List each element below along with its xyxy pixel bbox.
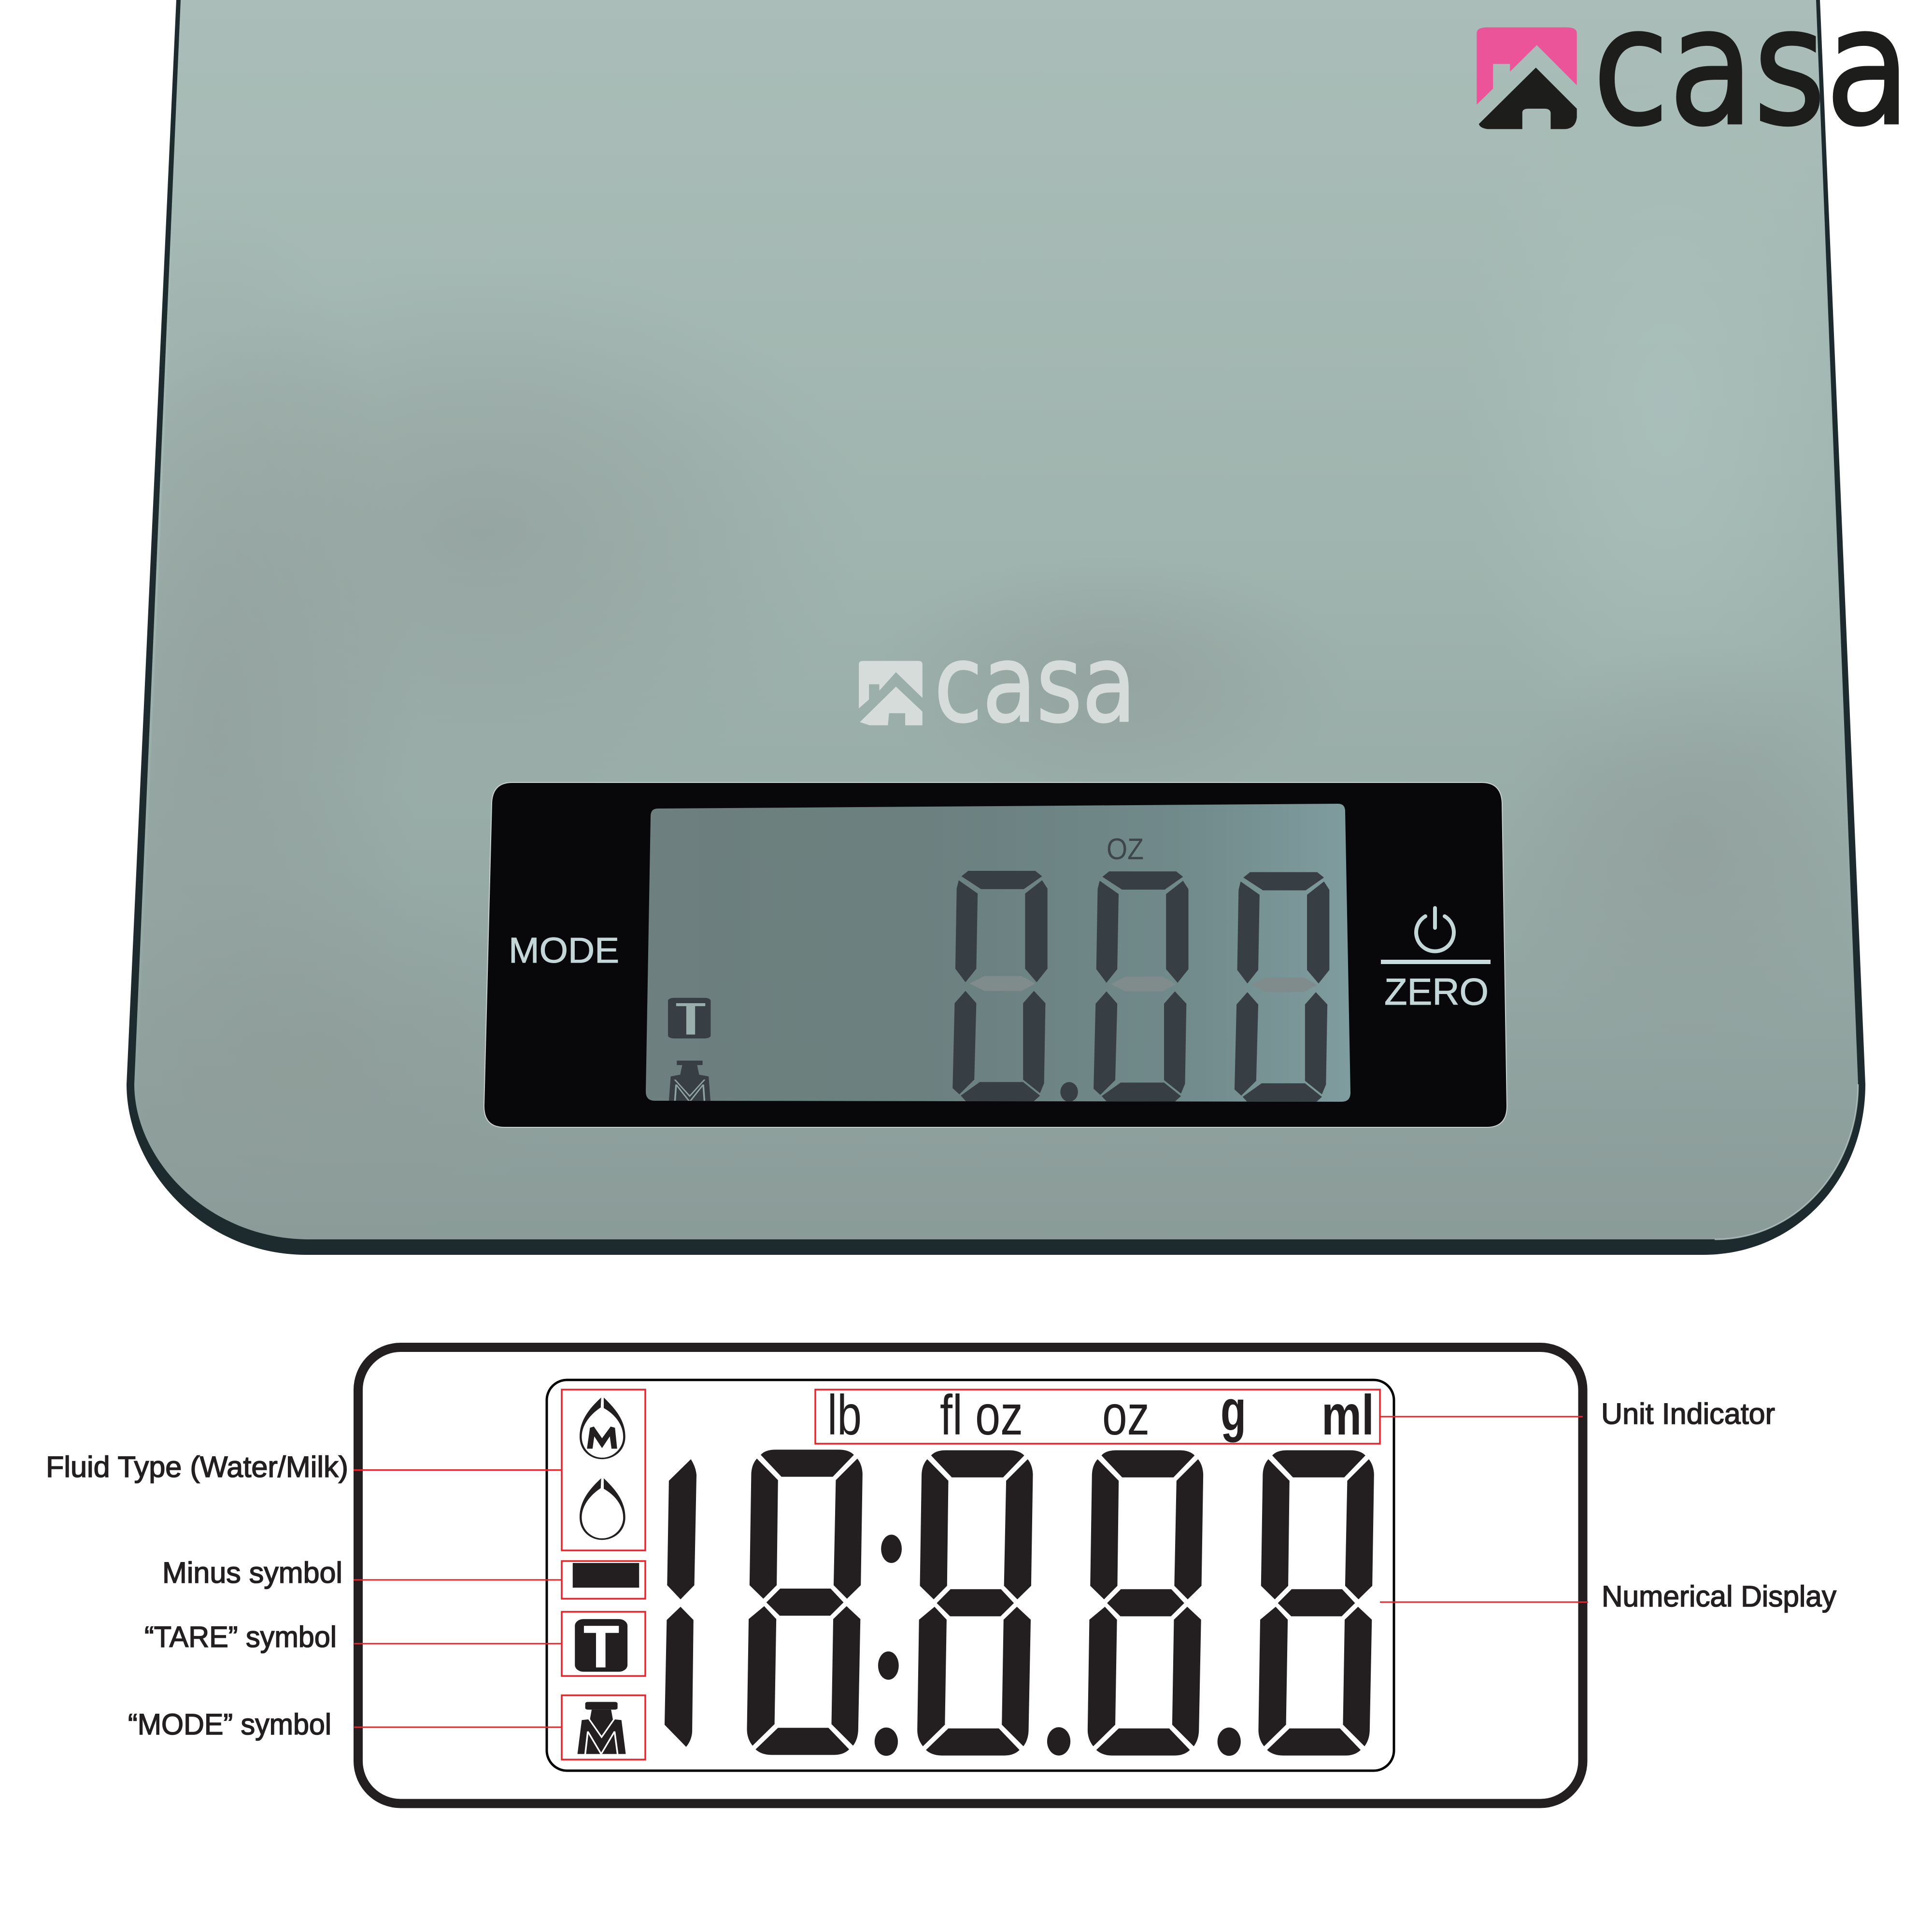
- scale highlight edge: [1715, 1084, 1858, 1239]
- label: unit indicator: Unit Indicator: [1601, 1397, 1775, 1430]
- red callout boxes: [562, 1390, 1380, 1760]
- leader lines: [354, 1417, 1588, 1727]
- bezel glass: [484, 782, 1507, 1127]
- box: unit indicator: [815, 1390, 1380, 1444]
- lcd tare icon: [668, 998, 710, 1038]
- lcd zero digit 1: [952, 871, 1048, 1103]
- watermark logo on scale: [859, 622, 1136, 747]
- icon: water drop: [580, 1478, 625, 1540]
- box: fluid type: [562, 1390, 645, 1550]
- watermark icon: [859, 661, 923, 725]
- colon and decimal dots: [875, 1534, 1241, 1756]
- leader: numerical display: [1380, 1602, 1588, 1603]
- callout labels: [46, 1397, 1836, 1741]
- numerical segments: [573, 1398, 1374, 1756]
- scale steel face: [14, 0, 1884, 1256]
- label: fluid type: Fluid Type (Water/Milk): [46, 1450, 348, 1483]
- digit 4: [1258, 1450, 1374, 1756]
- leader: mode symbol: [354, 1726, 562, 1728]
- label: mode symbol: “MODE” symbol: [128, 1708, 331, 1741]
- scale body edge: [127, 0, 1865, 1255]
- lcd mode icon: [668, 1061, 710, 1103]
- display diagram panel: [358, 1348, 1583, 1804]
- label: tare symbol: “TARE” symbol: [144, 1620, 337, 1653]
- unit: ml: ml: [1321, 1383, 1374, 1447]
- box: tare symbol: [562, 1612, 645, 1676]
- lcd zero digit 2: [1094, 871, 1189, 1104]
- icon: mode weight: [578, 1702, 626, 1754]
- kitchen scale: [14, 0, 1884, 1256]
- digit 3: [1088, 1450, 1203, 1756]
- leading one digit: [665, 1459, 696, 1747]
- digit 1: [747, 1449, 863, 1755]
- logo icon: house: [1477, 28, 1577, 129]
- box: mode symbol: [562, 1695, 645, 1760]
- casa logo: [1477, 0, 1910, 162]
- unit: fl oz: fl oz: [940, 1383, 1023, 1447]
- unit: g: g: [1221, 1378, 1246, 1443]
- unit: oz: oz: [1102, 1383, 1150, 1447]
- unit labels: [827, 1378, 1374, 1447]
- watermark wordmark: casa: [934, 622, 1136, 747]
- icon: tare T: [575, 1619, 627, 1672]
- box: minus symbol: [562, 1561, 645, 1599]
- outer frame: [358, 1348, 1583, 1804]
- ZERO button label: ZERO: [1384, 970, 1489, 1013]
- icon: power symbol: [1416, 908, 1454, 951]
- label: numerical display: Numerical Display: [1602, 1580, 1836, 1613]
- lcd decimal point: [1060, 1082, 1078, 1102]
- oz unit on lcd: OZ: [1107, 833, 1144, 866]
- lcd outline: [547, 1380, 1394, 1771]
- MODE button label: MODE: [509, 930, 619, 970]
- icon: milk drop: [580, 1398, 625, 1459]
- zero divider line: [1381, 960, 1491, 964]
- label: minus symbol: Minus symbol: [162, 1556, 342, 1589]
- leader: fluid type: [354, 1469, 562, 1471]
- unit: lb: lb: [827, 1383, 862, 1447]
- icon: minus bar: [573, 1563, 639, 1588]
- leader: unit indicator: [1380, 1416, 1583, 1417]
- digit 2: [917, 1450, 1033, 1756]
- lcd zero digit 3: [1235, 872, 1329, 1104]
- scale control bezel: [484, 782, 1507, 1127]
- leader: tare symbol: [354, 1643, 562, 1644]
- lcd window: [646, 804, 1350, 1104]
- leader: minus symbol: [354, 1579, 562, 1580]
